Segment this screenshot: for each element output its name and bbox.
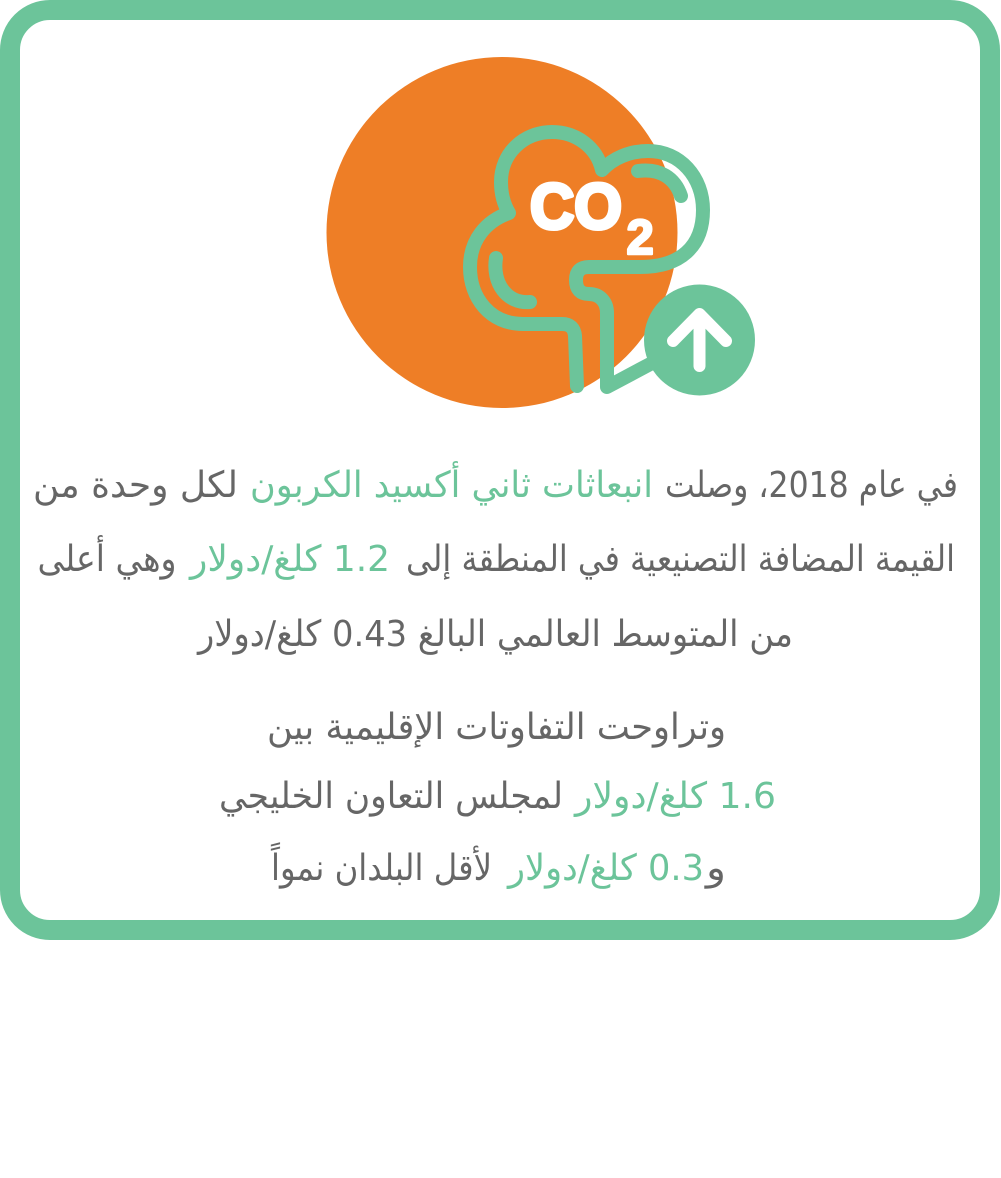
line 2 bbox=[38, 535, 955, 580]
CO2 label: CO bbox=[530, 170, 622, 242]
icon: CO2 cloud with rising arrow bbox=[326, 57, 755, 408]
CO2 label: 2 bbox=[626, 211, 654, 265]
cloud inner highlight left bbox=[495, 258, 530, 302]
cloud outline bbox=[470, 132, 703, 387]
orange circle bbox=[326, 57, 678, 408]
line 5: 1.6 كلغ/دولار bbox=[573, 776, 776, 817]
line 6: و bbox=[704, 848, 726, 889]
text block: first paragraph bbox=[33, 461, 958, 655]
CO2 label bbox=[530, 170, 654, 265]
line 4: وتراوحت التفاوتات الإقليمية بين bbox=[267, 707, 726, 748]
text block: second paragraph bbox=[219, 707, 776, 889]
cloud inner highlight right bbox=[638, 170, 681, 196]
line 3: من المتوسط العالمي البالغ 0.43 كلغ/دولار bbox=[196, 614, 793, 655]
panel: rounded green frame bbox=[10, 10, 990, 930]
line 1 bbox=[33, 461, 958, 506]
line 5: لمجلس التعاون الخليجي bbox=[219, 776, 563, 817]
line 2: وهي أعلى bbox=[38, 535, 176, 580]
line 2: 1.2 كلغ/دولار bbox=[188, 539, 390, 580]
line 1: انبعاثات ثاني أكسيد الكربون bbox=[250, 461, 653, 506]
line 1: في عام 2018، وصلت bbox=[665, 465, 958, 506]
line 5 bbox=[219, 776, 776, 817]
line 6: 0.3 كلغ/دولار bbox=[506, 848, 704, 889]
line 6: لأقل البلدان نمواً bbox=[270, 842, 492, 889]
line 1: لكل وحدة من bbox=[33, 465, 238, 506]
icon: up arrow badge bbox=[644, 284, 755, 396]
line 6 bbox=[270, 842, 726, 889]
